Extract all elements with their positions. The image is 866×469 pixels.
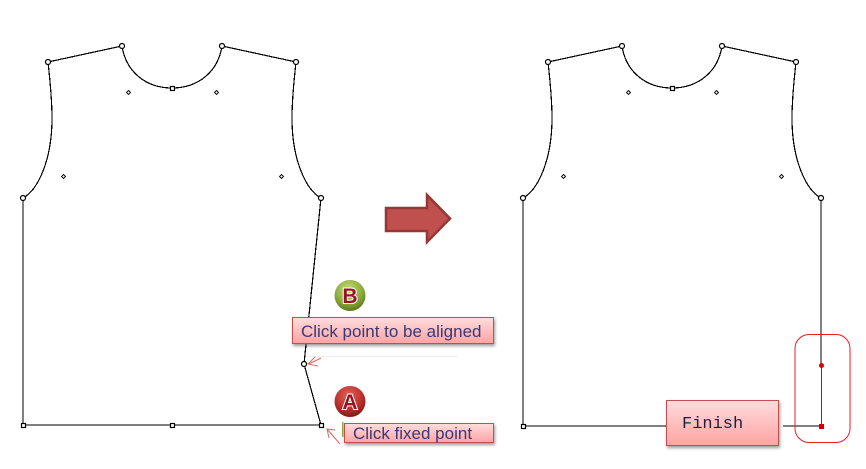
label: finish — [666, 400, 779, 446]
label: click fixed point: Click fixed point — [353, 424, 472, 443]
label: finish: Finish — [682, 415, 743, 434]
red highlight: aligned segment — [795, 334, 850, 442]
pointer arrow to point A — [327, 429, 340, 444]
faint shadow line under label — [308, 356, 458, 358]
right pattern piece: aligned bodice — [520, 44, 824, 428]
label: click point to be aligned — [292, 317, 494, 344]
pointer arrow to point B — [308, 357, 321, 366]
block arrow — [386, 195, 450, 242]
badge A: A — [342, 391, 358, 414]
left pattern piece: original bodice — [20, 44, 324, 428]
badge A — [334, 386, 366, 417]
label: click point to be aligned: Click point to be aligned — [301, 322, 482, 341]
green tick beside fixed point label — [342, 422, 344, 437]
badge B: B — [342, 285, 358, 308]
badge B — [334, 280, 366, 311]
